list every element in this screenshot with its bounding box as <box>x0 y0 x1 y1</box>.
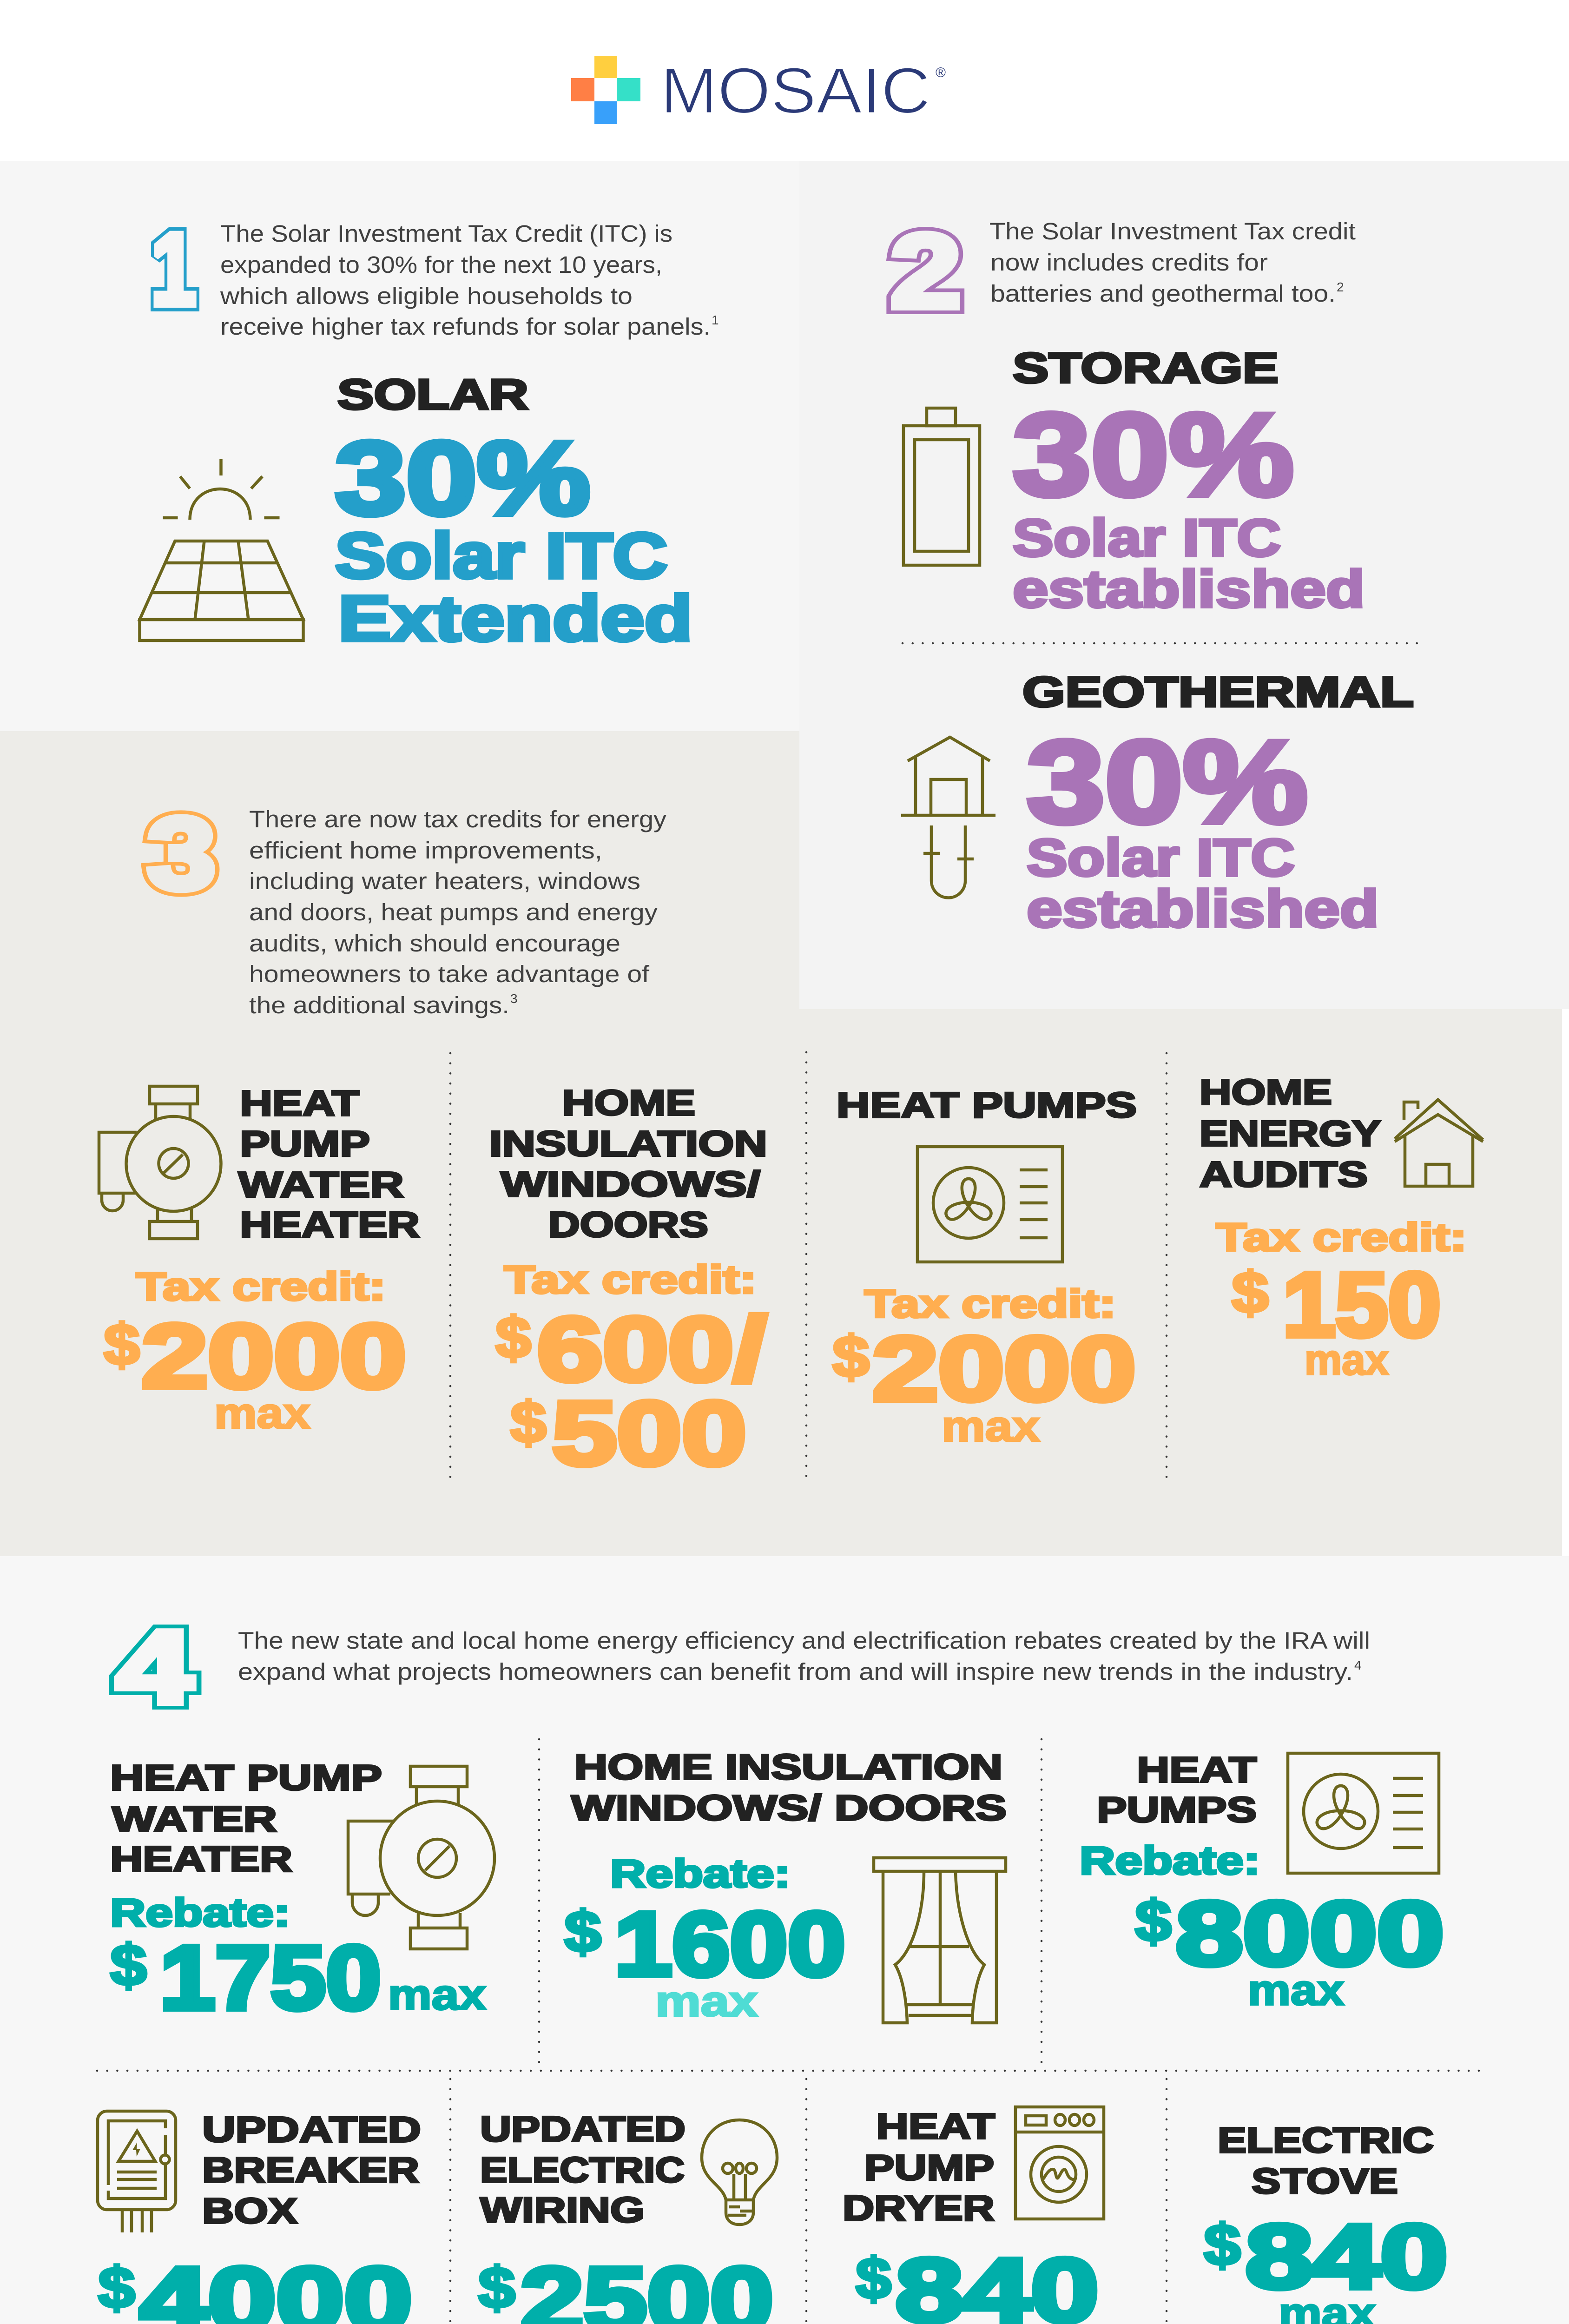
stat: rebate $8000 max: 8000 <box>1176 1883 1444 1984</box>
numeral 4: 4 <box>116 1610 193 1725</box>
numeral 4: 4 <box>116 1610 193 1725</box>
heading: ELECTRIC <box>1218 2120 1434 2160</box>
icon: house <box>1395 1100 1483 1186</box>
heading <box>1097 1750 1257 1830</box>
item: home energy audits credit <box>1200 1072 1483 1384</box>
heading <box>238 1083 420 1245</box>
stat: rebate $1750 max: Rebate: <box>110 1891 290 1934</box>
stat: $150 max: max <box>1305 1336 1389 1384</box>
heading: ELECTRIC <box>480 2150 685 2190</box>
heading: HOME <box>562 1083 695 1123</box>
heading <box>202 2110 421 2231</box>
stat: $2000 max: 2000 <box>872 1318 1136 1419</box>
icon: light bulb <box>702 2120 777 2225</box>
stat: storage 30% ITC established: established <box>1013 560 1365 618</box>
stat: storage 30% ITC established <box>1013 390 1365 618</box>
stat: solar 30% ITC extended <box>335 420 692 654</box>
icon: water heater pump <box>348 1766 494 1949</box>
icon: heat pump unit <box>1288 1753 1439 1873</box>
numeral 1: 1 <box>151 212 196 326</box>
heading: storage: STORAGE <box>1013 344 1279 392</box>
item: heat pump water heater credit <box>99 1083 420 1437</box>
icon: curtained window <box>874 1858 1006 2023</box>
stat: $2000 max: Tax credit: <box>864 1282 1116 1326</box>
text block: tax credits description <box>249 806 667 1018</box>
text block: tax credits description: efficient home improvements, <box>249 837 602 864</box>
numeral 3: 3 <box>147 796 216 911</box>
heading: INSULATION <box>489 1124 767 1164</box>
heading: HEAT <box>240 1083 359 1123</box>
item: heat pump water heater rebate <box>110 1758 494 2028</box>
text block: rebates description: The new state and local home energy efficiency and electrification rebates created by the IRA will <box>238 1627 1370 1654</box>
stat: $2000 max <box>832 1282 1136 1450</box>
stat: rebate $1600 max: 1600 <box>614 1894 845 1995</box>
panel: 1 solar ITC <box>0 161 799 731</box>
heading: DRYER <box>843 2188 995 2228</box>
text block: rebates description: expand what projects homeowners can benefit from and will inspire new trends in the industry. <box>238 1658 1353 1685</box>
heading: BREAKER <box>202 2150 419 2190</box>
item: updated breaker box rebate <box>98 2110 421 2324</box>
heading: DOORS <box>548 1205 708 1245</box>
stat: $600/$500: 500 <box>552 1383 746 1484</box>
heading: WINDOWS/ DOORS <box>571 1788 1007 1828</box>
item: heat pumps credit <box>832 1085 1137 1450</box>
stat: $2000 max: max <box>942 1403 1040 1450</box>
numeral 2: 2 <box>890 212 961 330</box>
logo: Mosaic <box>571 54 946 127</box>
heading: UPDATED <box>202 2110 421 2150</box>
stat: rebate $1750 max <box>110 1891 486 2028</box>
icon: breaker box <box>98 2111 176 2232</box>
stat: $840 max: $ <box>1204 2213 1241 2278</box>
stat: $600/$500: $ <box>510 1390 547 1455</box>
text block: tax credits description: audits, which should encourage <box>249 930 620 957</box>
stat: rebate $8000 max: Rebate: <box>1080 1839 1260 1882</box>
text block: tax credits description: and doors, heat pumps and energy <box>249 899 658 925</box>
item: updated electric wiring rebate <box>478 2109 777 2324</box>
stat: geothermal 30% ITC established: established <box>1027 879 1379 938</box>
stat: $150 max: 150 <box>1283 1254 1441 1355</box>
text block: solar ITC description: expanded to 30% for the next 10 years, <box>220 251 662 278</box>
numeral 1: 1 <box>151 212 196 326</box>
stat: $2000 max: $ <box>104 1313 140 1377</box>
heading: HEAT PUMP <box>110 1758 382 1798</box>
heading: HEAT PUMPS <box>837 1085 1137 1125</box>
stat: $600/$500: $ <box>495 1306 531 1370</box>
text block: tax credits description: 3 <box>510 991 518 1006</box>
item: electric stove rebate <box>1204 2120 1448 2324</box>
icon: sun and solar panel <box>139 459 303 640</box>
stat: $840 max: 840 <box>1246 2206 1448 2307</box>
icon: dryer <box>1015 2107 1104 2219</box>
stat: $2000 max: max <box>214 1390 310 1437</box>
stat: rebate $1750 max: 1750 <box>160 1927 381 2028</box>
text block: tax credits description: There are now tax credits for energy <box>249 806 667 832</box>
stat: $2000 max: $ <box>832 1325 870 1389</box>
text block: solar ITC description: which allows eligible households to <box>220 283 633 309</box>
stat: $2000 max <box>104 1265 406 1437</box>
heading: STOVE <box>1252 2161 1398 2201</box>
stat: rebate $1750 max: $ <box>110 1933 147 1998</box>
heading <box>843 2106 995 2228</box>
stat: $2000 max: Tax credit: <box>136 1265 386 1308</box>
heading: HOME <box>1200 1072 1332 1112</box>
heading <box>480 2109 686 2230</box>
text block: storage and geothermal description: 2 <box>1337 280 1344 294</box>
stat: $150 max: Tax credit: <box>1216 1215 1467 1259</box>
heading: HEAT <box>1137 1750 1257 1790</box>
text block: solar ITC description: 1 <box>712 313 719 327</box>
text block: tax credits description: including water heaters, windows <box>249 868 640 894</box>
heading: HEAT <box>876 2106 995 2146</box>
heading <box>110 1758 382 1879</box>
text block: rebates description: 4 <box>1354 1658 1362 1672</box>
heading: WINDOWS/ <box>501 1164 760 1204</box>
stat: solar 30% ITC extended: Solar ITC <box>335 520 667 592</box>
stat: $600/$500: 600/ <box>537 1299 766 1400</box>
text block: storage and geothermal description: The Solar Investment Tax credit <box>989 218 1356 244</box>
heading <box>571 1747 1007 1828</box>
heading: PUMP <box>864 2148 994 2188</box>
icon: geothermal house <box>901 737 995 898</box>
text block: solar ITC description: The Solar Investment Tax Credit (ITC) is <box>220 220 672 247</box>
stat: rebate $1600 max: Rebate: <box>610 1852 791 1895</box>
text block: solar ITC description <box>220 220 719 340</box>
stat: rebate $1600 max: $ <box>564 1900 601 1964</box>
numeral 2: 2 <box>890 212 961 330</box>
heading: WATER <box>112 1799 277 1839</box>
stat: rebate $1750 max: max <box>388 1971 486 2019</box>
stat: geothermal 30% ITC established: 30% <box>1027 717 1308 847</box>
heading <box>1200 1072 1381 1195</box>
item: heat pumps rebate <box>1080 1750 1444 2014</box>
text block: tax credits description: the additional savings. <box>249 992 509 1018</box>
stat: solar 30% ITC extended: 30% <box>335 420 590 536</box>
heading <box>1218 2120 1434 2201</box>
stat: storage 30% ITC established: Solar ITC <box>1013 508 1281 567</box>
heading: UPDATED <box>480 2109 686 2149</box>
heading: HEATER <box>240 1205 420 1245</box>
text block: solar ITC description: receive higher tax refunds for solar panels. <box>220 313 711 340</box>
stat: $600/$500 <box>495 1258 766 1484</box>
logo: Mosaic: MOSAIC <box>660 54 930 127</box>
heading: AUDITS <box>1200 1155 1368 1195</box>
heading: WIRING <box>480 2190 645 2230</box>
stat: $2000 max: 2000 <box>142 1306 406 1407</box>
stat: rebate $8000 max: $ <box>1135 1889 1172 1954</box>
stat: $2500 max <box>478 2249 773 2324</box>
stat: $600/$500: Tax credit: <box>504 1258 757 1301</box>
stat: geothermal 30% ITC established: Solar ITC <box>1027 828 1295 887</box>
stat: $150 max: $ <box>1232 1261 1269 1325</box>
stat: rebate $8000 max: max <box>1248 1967 1344 2014</box>
panel: 2 storage and geothermal <box>799 161 1569 1009</box>
heading: WATER <box>238 1165 404 1205</box>
stat: rebate $1600 max <box>564 1852 845 2025</box>
item: heat pump dryer rebate <box>843 2106 1104 2324</box>
heading: PUMP <box>240 1124 370 1164</box>
text block: rebates description <box>238 1627 1370 1685</box>
stat: storage 30% ITC established: 30% <box>1013 390 1294 520</box>
heading: HOME INSULATION <box>574 1747 1002 1787</box>
heading: solar: SOLAR <box>337 371 528 418</box>
panel: 4 state and local rebates <box>0 1556 1569 2324</box>
icon: water heater pump <box>99 1086 221 1239</box>
panel: 3 energy efficient home tax credits <box>0 731 1562 1556</box>
logo: Mosaic: ® <box>936 65 946 80</box>
heading <box>489 1083 767 1245</box>
stat: $150 max <box>1216 1215 1467 1384</box>
heading: BOX <box>202 2191 297 2231</box>
stat: $840 max <box>1204 2206 1448 2324</box>
text block: storage and geothermal description <box>989 218 1356 307</box>
stat: rebate $1600 max: max <box>655 1978 758 2025</box>
heading: HEATER <box>110 1839 292 1879</box>
text block: tax credits description: homeowners to take advantage of <box>249 961 650 987</box>
stat: $2500 max: $ <box>478 2256 515 2320</box>
item: home insulation windows doors rebate <box>564 1747 1007 2025</box>
stat: geothermal 30% ITC established <box>1027 717 1379 938</box>
text block: storage and geothermal description: batteries and geothermal too. <box>990 280 1336 307</box>
text block: storage and geothermal description: now includes credits for <box>990 249 1268 276</box>
stat: $840 max: $ <box>856 2246 891 2311</box>
heading: PUMPS <box>1097 1790 1257 1830</box>
stat: $4000 max <box>98 2249 412 2324</box>
heading: ENERGY <box>1200 1114 1381 1154</box>
stat: $840 max <box>856 2240 1099 2324</box>
icon: battery <box>903 408 980 565</box>
heading: geothermal: GEOTHERMAL <box>1022 668 1414 716</box>
stat: $4000 max: $ <box>98 2256 135 2320</box>
numeral 3: 3 <box>147 796 216 911</box>
icon: heat pump unit <box>917 1147 1062 1262</box>
stat: solar 30% ITC extended: Extended <box>338 583 692 654</box>
stat: rebate $8000 max <box>1080 1839 1444 2014</box>
item: home insulation windows and doors credit <box>489 1083 767 1484</box>
